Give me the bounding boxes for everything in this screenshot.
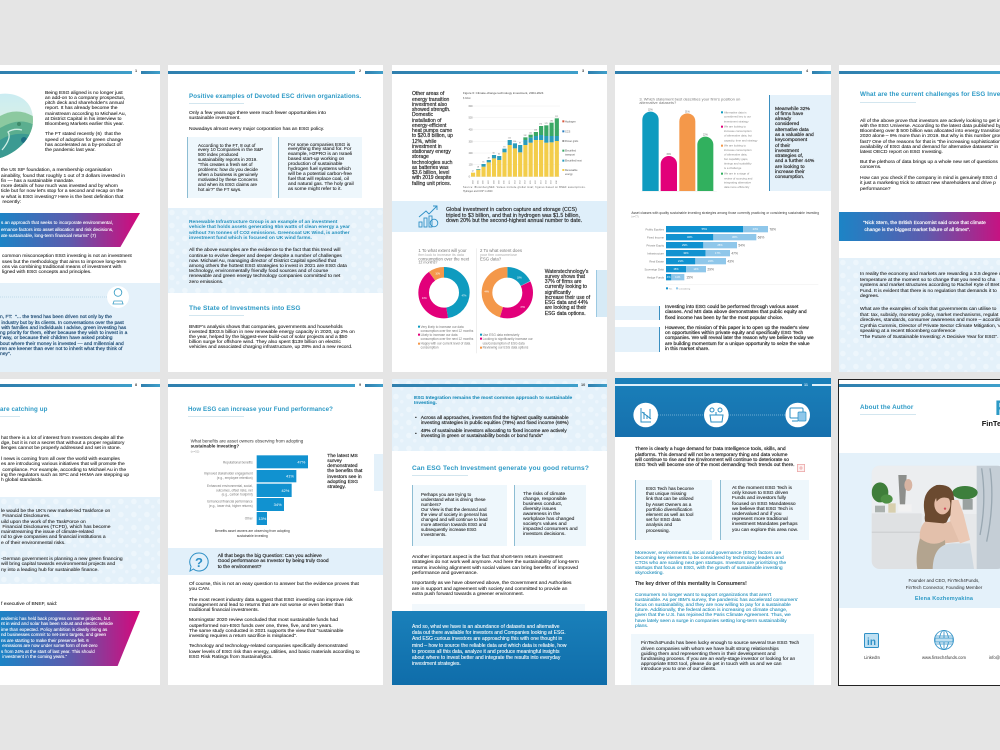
stacked bar chart: 2012 [514, 180, 516, 184]
text block: Investing into ESG could be performed through various asset classes. And MS data above demonstrates that public equity and fixed income has been by far the most popular choice. [665, 305, 807, 321]
charts: alternative data columns and asset class bars: 31% [685, 111, 690, 113]
charts: alternative data columns and asset class bars: 47% [731, 251, 738, 255]
stacked bar chart: transport [565, 154, 575, 157]
page number: 2 [359, 69, 361, 73]
charts: alternative data columns and asset class bars: 55% [702, 227, 708, 231]
stacked bar chart: 2015 [530, 180, 532, 184]
stacked bar chart: 190 [550, 120, 553, 122]
charts: alternative data columns and asset class bars: 32% [648, 110, 653, 112]
stacked bar chart: 35 [482, 162, 484, 164]
donut charts with legends: Use ESG data extensively [483, 333, 520, 337]
stacked bar chart: 179 [544, 123, 548, 125]
charts: alternative data columns and asset class bars: 23% [753, 227, 759, 231]
charts: alternative data columns and asset class bars: 54% [738, 243, 745, 247]
bar chart: benefits: Enhanced financial performance [207, 499, 253, 503]
stacked bar chart: Electrified heat [565, 160, 582, 163]
charts: alternative data columns and asset class bars: 22% [708, 259, 714, 263]
text block: SIF: the US SIF foundation, a membership organisation ainability, found that roughly 1 out of 3 dollars invested in fin — has a sustainable mandate. more details of how much was invested and by whom ticle but for now let's stop for a second and recap on the w what is ESG investing? Here is the best definition that recently: [1, 168, 125, 205]
donut charts with legends: consumption [421, 346, 439, 350]
icon: question mark bubble [189, 552, 209, 572]
charts: alternative data columns and asset class bars: increase consumption [724, 129, 752, 133]
header bar [0, 70, 132, 74]
bar chart: benefits: Reputational benefits [223, 460, 253, 464]
charts: alternative data columns and asset class bars: Alternative data is [724, 110, 747, 114]
heading: About the Author [860, 404, 913, 411]
panel: CCS band [392, 201, 607, 232]
charts: alternative data columns and asset class bars: 3. Which statement best describes your firm's position on [639, 96, 740, 101]
text block: intro: Being ESG aligned is no longer just an add-on to a company prospectus, pitch deck and shareholder's annual report. It has already become the mainstream according to Michael Au, at District Capital in his interview to Bloomberg Markets earlier this year. [45, 91, 126, 127]
bold line: The key driver of this mentality is Consumers! [635, 581, 747, 587]
text block: Other areas of energy transition investment also showed strength. Domestic installation of energy-efficient heat pumps came to $20.8 billion, up 12%, while investment in stationary energy storage technologies such as batteries was $3.6 billion, level with 2019 despite falling unit prices. [412, 91, 453, 187]
icon: globe [934, 630, 954, 650]
side panel [769, 95, 832, 191]
charts: alternative data columns and asset class bars: but capability gaps, [724, 157, 748, 161]
stacked bar chart: 12 [472, 170, 474, 172]
bar chart: benefits: 41% [286, 474, 294, 479]
stacked bar chart: 156 [534, 130, 537, 132]
text block: hat there is a lot of interest from Investors despite all the dge, but it is not a secret that without a proper regulatory llenges cannot be properly addressed and set in stone. [1, 436, 125, 451]
panel: page 11 data intelligence [615, 378, 831, 685]
text block: Importantly as we have observed above, the Government and Authorities are in support and agreement with society and committed to provide an extra push forward towards a greener environment. [412, 581, 571, 597]
stacked bar chart: 100 [469, 165, 473, 167]
stacked bar chart: 500 [469, 118, 473, 120]
page number: 11 [804, 382, 808, 386]
text block: FT statement: The FT stated recently (6) that the speed of adoption for green change has accelerated as a by-product of the pandemic last year. [45, 132, 123, 153]
charts: alternative data columns and asset class bars: alternative datasets? [639, 100, 677, 105]
donut charts with legends: 2 To what extent does [480, 248, 522, 253]
charts: alternative data columns and asset class bars: review of sourcing and [724, 176, 753, 180]
donut charts with legends: firm look to increase its data [418, 253, 465, 257]
contact labels: LinkedIn [864, 654, 880, 660]
page number: 3 [582, 69, 584, 73]
stacked bar chart: 212 [555, 116, 558, 118]
panel: page 8 regulators [0, 379, 160, 685]
charts: alternative data columns and asset class bars: Private Equity [647, 243, 665, 247]
text block: misconception: common misconception ESG investing is not an investment sses but the methodology that aims to improve long-term ons via combining traditional means of investment with ligned with ESG concepts and principles. [2, 254, 132, 275]
stacked bar chart: 93 [503, 146, 505, 148]
charts: alternative data columns and asset class bars: capacity, time and strategy [724, 139, 758, 143]
charts: alternative data columns and asset class bars: We are looking to [724, 144, 746, 148]
stacked bar chart: 2016 [535, 180, 537, 184]
icon: question mark bubble: ? [195, 555, 203, 570]
side accent [596, 270, 608, 317]
charts: alternative data columns and asset class bars: of alternative data, but [724, 134, 752, 138]
charts: alternative data columns and asset class bars: data more efficiently [724, 185, 750, 189]
side accent [374, 454, 383, 491]
text block: How can you check if the company in mind is genuinely ESG d it just a marketing trick to attract new shareholders and drive p performance? [860, 176, 997, 192]
question text: All that begs the big Question: Can you achieve Good performance as Investor by being truly Good to the environment? [218, 554, 329, 570]
charts: alternative data columns and asset class bars: Hedge Funds [647, 275, 665, 279]
box text: At the moment ESG Tech is only known to ESG driven Funds and investors fully focused on ESG Mandatesso we believe that ESG Tech is undervalued and if you represent more traditional investment Mandates perhaps you can explore this area now. [732, 486, 798, 533]
header bar [0, 384, 132, 387]
stacked bar chart: 62 [498, 154, 500, 156]
donut charts with legends: Happy with our current level of data [421, 342, 471, 346]
accent box [614, 327, 660, 352]
callout text: s an approach that seeks to incorporate environmental, ernance factors into asset allocation and risk decisions, ate sustainable, long-term financial returns" (7) [1, 220, 113, 238]
stacked bar chart: 2007 [488, 180, 490, 184]
donut charts with legends: consumption over the next 12 months [421, 337, 474, 341]
heading: How ESG can increase your Fund performance? [188, 406, 333, 413]
callout: gradient definition [0, 213, 140, 247]
charts: alternative data columns and asset class bars: 11% [675, 275, 681, 279]
donut charts with legends: consumption over the next 12 months [421, 329, 474, 333]
author photo [872, 466, 1000, 569]
page number: 4 [806, 69, 808, 73]
stacked bar chart: 2010 [504, 180, 506, 184]
stacked bar chart: 66 [493, 153, 495, 155]
illustration: green landscape blob [0, 94, 33, 158]
charts: alternative data columns and asset class bars: 68% [758, 235, 764, 239]
charts: alternative data columns and asset class bars: 21% [678, 259, 684, 263]
call to action text: FinTech4Funds has been lucky enough to source several true ESG Tech driven companies with whom we have built strong relationships guiding them and representing them in their development and fundraising process. If you are an early-stage investor or looking for an appropriate ESG tool, please do get in touch with us and we can introduce you to one of our clients. [641, 641, 799, 672]
text block: The latest MS survey demonstrated the benefits that investors see in adopting ESG strategy. [327, 454, 362, 490]
callout text: andemic has held back progress on some projects, but nt in wind and solar has been robust and electric vehicle ime than expected. Policy ambition is clearly rising as nd businesses commit to net-zero targets, and green ns are starting to make their presence felt. 6 emissions are now under some form of net-zero s from 24% at the start of last year. This should investment in the coming years." [1, 616, 113, 659]
dashed divider with icon [0, 286, 129, 308]
charts: alternative data columns and asset class bars: timings and scalability [724, 162, 752, 166]
text block: -German government is planning a new green financing will bring capital towards environmental projects and ny into a leading hub for sustainable finance. [1, 557, 123, 573]
charts: alternative data columns and asset class bars: 29% [707, 267, 714, 271]
charts: alternative data columns and asset class bars: 15% [686, 275, 693, 279]
bar chart: benefits [190, 438, 308, 538]
panel: question band [168, 548, 383, 575]
stacked bar chart: 2019 [551, 180, 553, 184]
stacked bar chart: 0 [469, 177, 471, 179]
callout text: "Nick Stern, the British Economist said once that climate change is the biggest market failure of all times". [863, 221, 986, 233]
stacked bar chart: 2013 [519, 180, 521, 184]
text block: There is clearly a huge demand for Data Intelligence tools, skills, and platforms. This demand will not be a temporary thing and data volume will continue to rise and the Environment will continue to deteriorate so ESG Tech will become one of the most demanding Tech trends out there. [635, 447, 795, 468]
stacked bar chart: 48 [488, 158, 490, 160]
header bar [839, 384, 1000, 387]
bar chart: benefits: (e.g., lower risk, higher returns) [209, 504, 253, 508]
donut charts with legends: 43% [422, 298, 427, 300]
box: FT [187, 137, 272, 198]
text block: What are the examples of tools that governments can utilise to that: tax, subsidy, monetary policy, market mechanisms, regulat directives, standards, consumer awareness and more – accordin Cynthia Cummis, Director of Private Sector Climate Mitigation, V speaking at a recent Bloomberg conference "The Future of Sustainable Investing: A Decisive Year for ESG". [860, 307, 1000, 340]
donut charts with legends: 12 months? [418, 261, 437, 265]
stacked bar chart [463, 91, 586, 193]
stacked bar chart: Hydrogen [565, 120, 576, 123]
bar chart: benefits: sustainable investing [237, 534, 268, 538]
stacked bar chart: 2017 [540, 180, 542, 184]
bar chart: benefits: (n=52) [191, 449, 199, 453]
text block: Morningstar 2020 review concluded that most sustainable funds had outperformed non-ESG funds over one, three, five, and ten years. The same study conducted in 2021 supports the view that "sustainable investing requires a return sacrifice is misplaced". [189, 618, 343, 639]
stacked bar chart: 97 [519, 143, 521, 145]
stacked bar chart: 2009 [499, 180, 501, 184]
text block: Nowadays almost every major corporation has an ESG policy. [189, 127, 324, 132]
charts: alternative data columns and asset class bars: Sovereign Debt [644, 267, 664, 271]
charts: alternative data columns and asset class bars: 43% [727, 259, 734, 263]
bullets: • • [415, 416, 417, 437]
box [514, 485, 586, 546]
panel: blue closing [392, 611, 607, 685]
charts: alternative data columns and asset class bars: considered key to our [724, 115, 751, 119]
text block: Technology and technology-related companies specifically demonstrated lower levels of ESG risk than energy, utilities, and basic materials according to ESG Risk Ratings from Sustainalytics. [189, 644, 360, 660]
text block: In reality the economy and markets are rewarding a 3.5 degree c temperature at the moment so to change that you need to cha systems and market structures according to Rachel Kyte of Bret Fund. It is evident that there is no regulation that demands it to degrees. [860, 272, 1000, 299]
bar chart: benefits: 13% [258, 516, 267, 521]
donut charts with legends: Reviewing our ESG data options [483, 346, 529, 350]
donut charts with legends: use/consumption of ESG data [483, 341, 525, 345]
donut charts with legends: 37% [520, 307, 525, 309]
stacked bar chart: 2006 [483, 180, 485, 184]
text block: All the above examples are the evidence to the fact that this trend will continue to evolve deeper and deeper despite a number of challenges now. Michael Au, managing director of District Capital specified that among others the hottest ESG strategies to invest in 2021 are ESG data technology, environmentally friendly food sources and of course renewable and green energy technology companies committed to net zero emissions. [189, 248, 347, 285]
bar chart: benefits: sustainable investing? [191, 444, 239, 449]
callout: gradient quote band [839, 212, 1000, 241]
donut charts with legends: Looking to significantly increase our [483, 337, 533, 341]
stacked bar chart: 2018 [546, 180, 548, 184]
icon: small plus box [797, 464, 805, 472]
charts: alternative data columns and asset class bars: We are in a stage of [724, 172, 749, 176]
charts: alternative data columns and asset class bars: 32% [687, 235, 693, 239]
stacked bar chart: 300 [469, 141, 473, 143]
stacked bar chart: 2011 [509, 180, 511, 184]
bar chart: benefits: 47% [297, 460, 306, 465]
charts: alternative data columns and asset class bars: (n=77) [631, 216, 639, 219]
donut charts with legends: Likely to increase our data [421, 333, 458, 337]
stacked bar chart: 18 [477, 167, 479, 169]
panel: patterned band [168, 208, 383, 293]
box text: For some companies ESG is everything they stand for. For example, H2PRO is an Israeli based start-up working on production of sustainable hydrogen fuel systems which will be a potential carbon-free fuel that will replace coal, oil and natural gas. The holy grail as some might refer to it. [288, 142, 354, 192]
charts: alternative data columns and asset class bars: Yes [669, 288, 672, 290]
quote text: n, FT: "... the trend has been driven not only by the industry but by its clients. In conversations over the past with families and individuals I advise, green investing has ng priority for them, either because they wish to invest in a f way, or because their children have asked probing bout where their money is invested — and millennial and ren are keener than ever not to inherit what they think of ney". [0, 315, 127, 357]
panel: page 4 alternative data [615, 65, 831, 372]
panel: page 5 challenges [839, 65, 1000, 372]
panel: page 10 good returns [392, 379, 607, 685]
callout: gradient quote [0, 611, 140, 666]
panel: patterned top [392, 379, 607, 451]
charts: alternative data columns and asset class bars: 30% [683, 251, 689, 255]
bar chart: benefits: Other [245, 516, 253, 520]
icon: LinkedIn: in [867, 637, 876, 648]
teal highlight: ESG Integration remains the most common approach to sustainable Investing. [414, 396, 572, 406]
heading: The State of Investments into ESG [189, 305, 301, 312]
panel: patterned band [0, 497, 160, 584]
stacked bar chart: Renewable [565, 169, 578, 172]
bar chart: benefits: Benefits asset owners are observing from adopting [215, 529, 290, 533]
icon: rising chart [418, 206, 438, 228]
text block: However, the mission of this paper is to open up the reader's view on opportunities within private equity and specifically ESG Tech companies. We will reveal later the reason why we believe today we are building momentum for a unique opportunity to seize the value in this market share. [665, 326, 814, 352]
panel: page 2 positive examples [168, 65, 383, 372]
bar chart: benefits: Improved stakeholder engagement [204, 472, 253, 476]
stacked bar chart: 110 [513, 141, 516, 143]
bullet text: Across all approaches, investors find the highest quality sustainable investing strategies in public equities (78%) and fixed income (69%) [421, 416, 569, 426]
bar chart: benefits: 42% [281, 488, 290, 493]
band text: Global investment in carbon capture and storage (CCS) tripled to $3 billion, and that in hydrogen was $1.5 billion, down 20% but the second-highest annual number to date. [446, 207, 582, 224]
header bar [392, 384, 578, 387]
stacked bar chart: 174 [539, 124, 542, 126]
bullet text: 48% of sustainable investors allocating to fixed income are actively investing in green or sustainability bonds or bond funds" [421, 429, 567, 439]
page number: 10 [581, 382, 585, 386]
box: call to action [631, 634, 814, 685]
bar chart: benefits: outcomes, offset risks, net [216, 488, 253, 492]
side panel text: Meanwhile 32% of firms have already considered alternative data as a valuable and keycomponent of their investment strategies of, and a further 44% are looking to increase their consumption. [775, 107, 814, 180]
header bar [168, 70, 355, 74]
bar chart: benefits: 34% [274, 502, 282, 507]
charts: alternative data columns and asset class bars: 15% [673, 267, 679, 271]
text block: But the plethora of data brings up a whole new set of questions concerns. [860, 160, 998, 170]
panel: blue header with icons [615, 378, 831, 437]
bar chart: benefits: (e.g., employee retention) [217, 476, 253, 480]
stacked bar chart: 400 [469, 130, 473, 132]
charts: alternative data columns and asset class bars: of alternative data, [724, 152, 747, 156]
header bar [615, 384, 802, 386]
donut charts with legends [418, 248, 533, 354]
charts: alternative data columns and asset class bars: investment strategy [724, 119, 749, 123]
box: H2PRO [278, 137, 362, 198]
header bar [839, 70, 1000, 74]
text block: Only a few years ago there were much fewer opportunities into sustainable investment. [189, 111, 326, 121]
charts: alternative data columns and asset class bars: Infrastructure [647, 251, 664, 255]
charts: alternative data columns and asset class bars: 14% [693, 267, 699, 271]
text block: l news is coming from all over the world with examples es are introducing various initiatives that will promote the compliance. For example, according to Michael Au in the ing the regulators such as SFC and HKMA are stepping up h global standards. [1, 457, 129, 483]
charts: alternative data columns and asset class bars: 29% [682, 243, 688, 247]
stacked bar chart: 2005 [478, 180, 480, 184]
box text: ESG Tech has become that unique missing link that can be utilized by Asset Owners as a portfolio diversification element as well as tool set for ESG data analysis and processing. [646, 486, 694, 533]
panel: page 1 introduction [0, 65, 160, 372]
author name: Elena Kozhemyakina [915, 596, 973, 602]
donut charts with legends: 18% [517, 278, 522, 280]
charts: alternative data columns and asset class bars: Asset classes with quality sustainable investing strategies among those currently practicing or considering sustainable investing [631, 211, 819, 215]
pale strip [412, 604, 585, 611]
stacked bar chart: $ billion [463, 98, 472, 100]
author role: Founder and CEO, FinTech4Funds, FinTech Connector, Founding Member [906, 578, 982, 590]
header bar [615, 70, 802, 74]
donut charts with legends: consumption over the next [418, 256, 470, 261]
box [720, 480, 809, 540]
stacked bar chart: Power grids [565, 140, 579, 143]
charts: alternative data columns and asset class bars: 15% [666, 154, 671, 156]
teal highlight: Renewable Infrastructure Group is an example of an investment vehicle that holds assets generating 9bn watts of clean energy a year without 7m tonnes of CO2 emissions. Greencoat UK Wind, is another investment fund which is focused on UK wind farms. [189, 220, 350, 241]
charts: alternative data columns and asset class bars: 4% [667, 275, 671, 279]
charts: alternative data columns and asset class bars: increase consumption [724, 148, 752, 152]
bar chart: benefits: (e.g., carbon footprint) [222, 493, 253, 497]
accent box [614, 306, 660, 320]
donut charts with legends: 1 To what extent will your [418, 248, 467, 253]
panel: page 3 energy investment [392, 65, 607, 372]
donut charts with legends: 10% [435, 274, 440, 276]
heading: Can ESG Tech Investment generate you good returns? [412, 465, 589, 472]
stacked bar chart: 2020 [556, 180, 558, 184]
charts: alternative data columns and asset class bars: 25% [717, 243, 723, 247]
charts: alternative data columns and asset class bars: integrating alternative [724, 181, 751, 185]
stacked bar chart: CCS [565, 130, 571, 133]
donut charts with legends: 47% [462, 296, 466, 298]
stacked bar chart: Figure 6: Climate-change technology investment, 2004-2024 [463, 91, 544, 95]
teal text: Moreover, environmental, social and governance (ESG) factors are becoming key elements to be considered by technology leaders and CTOs who are scaling next gen startups. Investors are prioritizing the startups that focus on ESG, with the growth of sustainable investing skyrocketing. [635, 551, 786, 576]
box text: Perhaps you are trying to understand what is driving these numbers? Our View is that the demand and the view of society in general has changed and will continue to lead more attention towards ESG and subsequently increase ESG Investments. [421, 492, 488, 537]
bar chart: benefits: Enhanced environmental, social, [207, 484, 253, 488]
page number: 1 [135, 69, 137, 73]
donut charts with legends: 44% [484, 291, 489, 293]
box text: According to the FT, 8 out of every 10 Companies in the S&P 500 index produced sustainability reports in 2019. "This creates a fresh set of problems: how do you decide when a business is genuinely motivated by these Concerns and when its ESG claims are hot air?" the FT says. [198, 142, 263, 192]
teal text: Consumers no longer want to support organizations that aren't sustainable. As per IBM's survey, the pandemic has acceleratd consumers' focus on sustainability, and they are now willing to pay for a sustainable future. Additionally, the federal action is increasing on climate change, given that the U.S. has rejoined the Paris Climate Agreement. Thus, we have lately seen a surge in companies setting long-term sustainability plans. [635, 593, 798, 629]
text block: BNEF's analysis shows that companies, governments and households invested $303.5 billion in new renewable energy capacity in 2020, up 2% on the year, helped by the biggest-ever build-out of solar projects and a $50 billion surge for offshore wind. They also spent $139 billion on electric vehicles and associated charging infrastructure, up 28% and a new record. [189, 324, 355, 350]
box [635, 480, 712, 540]
page number: 9 [359, 382, 361, 386]
page number: 8 [135, 382, 137, 386]
panel: patterned reality [839, 258, 1000, 372]
stacked bar chart: 200 [469, 153, 473, 155]
text block: All of the above prove that investors are actively looking to get in with the ESG Universe. According to the latest data published by Bloomberg over $ 500 billion was allocated into energy transition 2020 alone – 9% more than in 2019. But why is this number grow fast? One of the reasons for that is "the increasing sophistication availability of ESG data and demand for alternative datasets" in latest OECD report on ESG Investing. [860, 119, 1000, 155]
donut charts with legends: your firm consume/use [480, 253, 517, 257]
stacked bar chart: Source: BloombergNEF. Values include global total; figures based on BNEF assumptions. [463, 186, 586, 189]
charts: alternative data columns and asset class bars: 22% [703, 135, 708, 137]
icons row [633, 402, 810, 428]
header bar [392, 70, 578, 74]
stacked bar chart: 2008 [493, 180, 495, 184]
header bar [168, 384, 355, 387]
text block: Another important aspect is the fact that short-term return investment strategies do not work well anymore. And here the sustainability of long-term returns involving alignment with social values can bring benefits of improved performance and governance. [412, 555, 579, 576]
box [412, 485, 507, 546]
charts: alternative data columns and asset class bars: 17% [715, 251, 721, 255]
charts: alternative data columns and asset class bars: is a challenge [724, 166, 742, 170]
charts: alternative data columns and asset class bars: 36% [732, 235, 738, 239]
stacked bar chart: Hydrogen and CCS* in 2020 [463, 190, 493, 193]
panel: quote [0, 283, 160, 372]
charts: alternative data columns and asset class bars: 78% [769, 227, 776, 231]
panel: page 12 about the author [838, 379, 1000, 686]
stacked bar chart: 2014 [525, 180, 527, 184]
heading: Positive examples of Devoted ESC driven organizations. [189, 93, 361, 100]
stacked bar chart: 2004 [472, 180, 474, 184]
charts: alternative data columns and asset class bars: Public Equities [645, 227, 665, 231]
stacked bar chart: 132 [523, 135, 527, 137]
charts: alternative data columns and asset class bars: Real Estate [649, 259, 664, 263]
icon: LinkedIn [864, 633, 879, 648]
charts: alternative data columns and asset class bars: Fixed Income [647, 235, 664, 239]
panel: page 9 fund performance [168, 379, 383, 685]
text block: The most recent industry data suggest that ESG investing can improve risk management and lead to returns that are not worse or even better than traditional financial investments. [189, 598, 353, 612]
charts: alternative data columns and asset class bars: We are looking to [724, 125, 746, 129]
text block: Of course, this is not an easy question to answer but the evidence proves that you CAN. [189, 582, 359, 592]
text block: Waterstechnology: Waterstechnology's survey shows that 37% of firms are currently looking to significantly increase their use of ESG data and 44% are looking at their ESG data options. [545, 269, 590, 317]
text block: f executive of BNEF, said: [1, 602, 57, 607]
heading: are catching up [0, 406, 48, 413]
stacked bar chart: Electrified [565, 150, 577, 153]
panel: author band [839, 453, 1000, 608]
donut charts with legends: Very likely to increase our data [421, 325, 464, 329]
donut charts with legends: ESG data? [480, 256, 502, 261]
bar chart: benefits: What benefits are asset owners observing from adopting [191, 438, 304, 443]
stacked bar chart: 142 [529, 132, 532, 134]
charts: alternative data columns and asset class bars [631, 96, 819, 290]
stacked bar chart: energy [565, 173, 573, 176]
box text: The risks of climate change, responsible business conduct, diversity issues awareness in the workplace has changed society's values and impacted consumers and investors decisions. [523, 492, 578, 537]
stacked bar chart: 122 [508, 138, 511, 140]
text block: le would be the UK's new market-led Taskforce on Financial Disclosures. uild upon the work of the TaskForce on Financial Disclosures (TCFD), which has become mainstreaming the issue of climate-related nd to give companies and financial institutions a e of their environmental risks. [1, 509, 110, 546]
charts: alternative data columns and asset class bars: Considering [679, 287, 691, 290]
website label: www.fintech4funds.com [922, 654, 966, 660]
closing text: And so, what we have is an abundance of datasets and alternative data out there available for investors and Companies looking at ESG. And ESG curious investors are approaching this with one thought in mind – how to source the reliable data and which data is reliable, how to process all this data, analyze it and produce meaningful insights about where to invest better and integrate the results into everyday investment strategies. [412, 624, 566, 667]
stacked bar chart: 600 [469, 106, 473, 108]
